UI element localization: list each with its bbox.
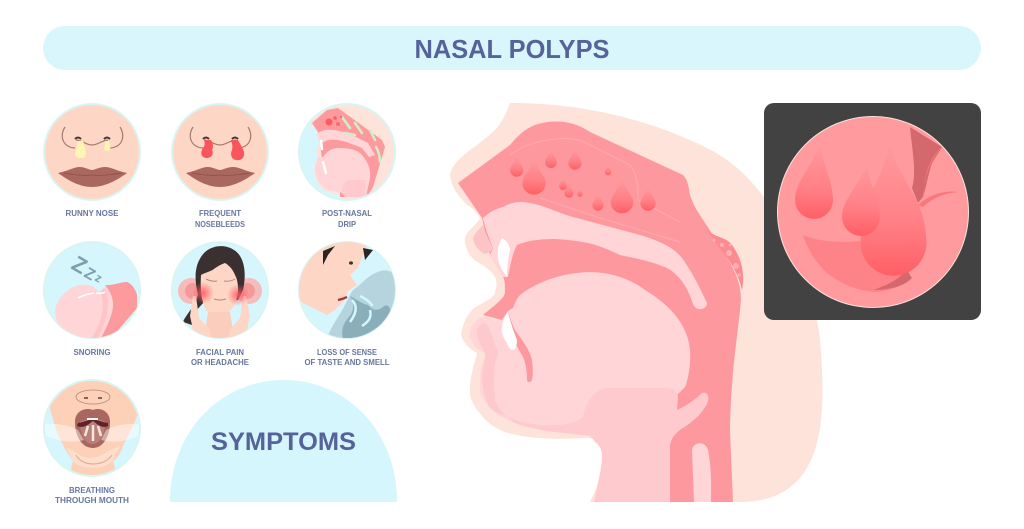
symptom: snoring xyxy=(43,241,141,340)
nasal membrane outline xyxy=(510,139,680,242)
esophagus xyxy=(692,443,711,502)
symptom: frequent nosebleeds xyxy=(171,103,269,201)
nostril xyxy=(473,225,493,254)
symptom: loss of sense of taste and smell xyxy=(298,241,396,339)
label: facial pain or headache: OR HEADACHE xyxy=(191,358,250,367)
label: snoring: SNORING xyxy=(74,348,110,357)
inset: magnified polyps xyxy=(764,103,981,320)
symptom: breathing through mouth xyxy=(43,378,141,480)
label: post-nasal drip xyxy=(322,209,372,229)
lower teeth xyxy=(502,311,517,350)
anatomy: head cross-section xyxy=(450,103,823,502)
airway and nasal cavity xyxy=(458,121,741,502)
symptoms semicircle heading: SYMPTOMS xyxy=(211,428,356,456)
nasal polyps xyxy=(510,149,656,213)
lower pink tongue and jaw xyxy=(469,272,690,440)
icon: sleep letters: Z xyxy=(81,265,98,284)
symptoms semicircle heading xyxy=(170,380,397,502)
title banner: NASAL POLYPS xyxy=(414,34,610,64)
label: facial pain or headache: FACIAL PAIN xyxy=(196,348,244,357)
label: loss of sense of taste and smell: OF TASTE AND SMELL xyxy=(304,358,390,367)
soft palate band xyxy=(483,202,707,309)
neck and larynx xyxy=(507,388,708,502)
lower lip xyxy=(477,323,507,417)
label: loss of sense of taste and smell xyxy=(304,348,390,367)
label: frequent nosebleeds: FREQUENT xyxy=(199,209,241,218)
tongue streak xyxy=(507,310,533,382)
symptom: post-nasal drip xyxy=(298,103,396,201)
label: post-nasal drip: POST-NASAL xyxy=(322,209,372,218)
label: facial pain or headache xyxy=(191,348,250,367)
label: frequent nosebleeds xyxy=(195,209,246,229)
symptom: facial pain or headache xyxy=(171,241,269,345)
title banner xyxy=(43,26,981,70)
label: breathing through mouth: BREATHING xyxy=(69,486,115,495)
label: breathing through mouth: THROUGH MOUTH xyxy=(55,496,129,505)
label: loss of sense of taste and smell: LOSS OF SENSE xyxy=(317,348,378,357)
icon: sleep letters: Z xyxy=(68,251,92,279)
label: breathing through mouth xyxy=(55,486,129,505)
label: runny nose: RUNNY NOSE xyxy=(66,209,119,218)
label: frequent nosebleeds: NOSEBLEEDS xyxy=(195,220,246,229)
icon: sleep letters xyxy=(68,251,105,286)
label: post-nasal drip: DRIP xyxy=(338,220,357,229)
upper teeth xyxy=(498,238,510,277)
symptom: runny nose xyxy=(43,103,141,201)
icon: sleep letters: z xyxy=(92,270,105,286)
head silhouette xyxy=(450,103,823,502)
polyp growth at throat wall xyxy=(706,229,743,290)
